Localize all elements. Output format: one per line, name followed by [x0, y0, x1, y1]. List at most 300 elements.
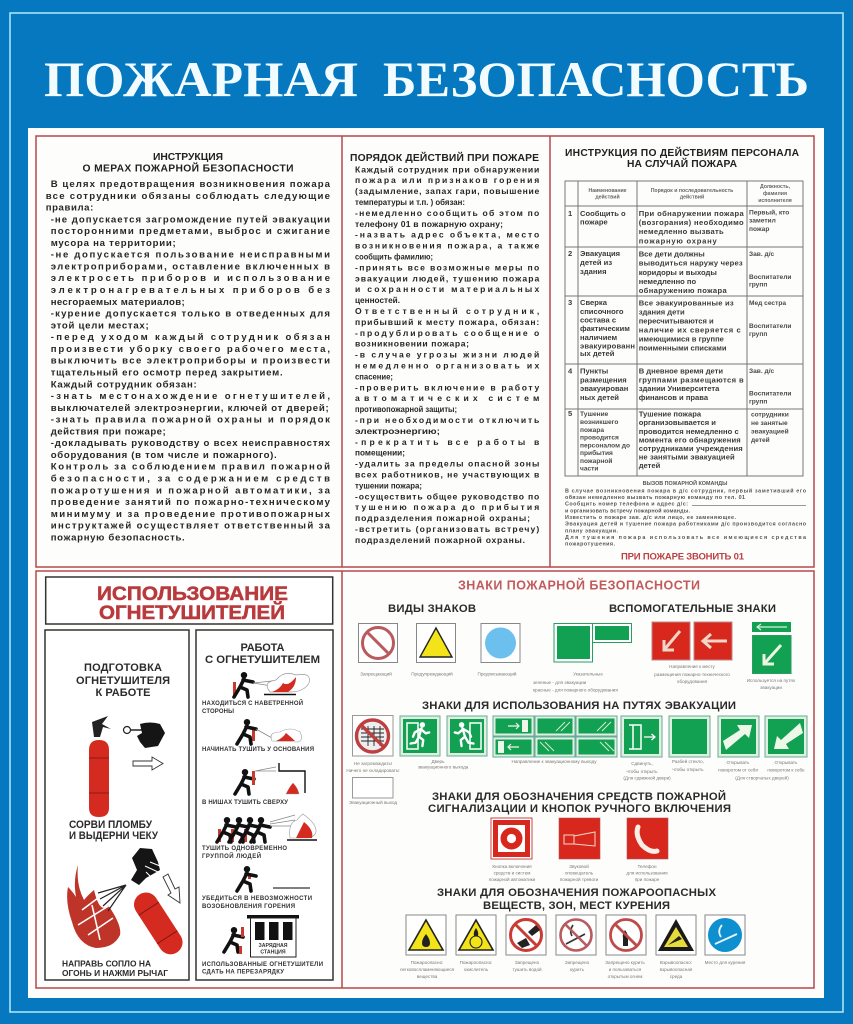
table: staff actions: (возгорания) необходимо	[639, 218, 744, 227]
text block: procedure: телефону 01 в пожарную охрану;	[355, 219, 503, 229]
text block: instruction rules: действия при пожаре;	[51, 426, 166, 437]
sign: explosive: Взрывоопасно:	[660, 960, 692, 965]
sign: red direction arrows: оборудования	[677, 679, 708, 684]
table: staff actions: Должность,	[760, 184, 791, 190]
sign: slide to open	[621, 716, 671, 780]
sign: mandatory	[478, 624, 520, 676]
table: staff actions: 3	[568, 298, 572, 307]
heading: staff instruction: ИНСТРУКЦИЯ ПО ДЕЙСТВИЯМ ПЕРСОНАЛА	[565, 146, 800, 159]
table: staff actions: здания	[580, 267, 607, 276]
text block: instruction rules: инструктажей осуществляет ответственный за	[51, 521, 331, 532]
sign: red direction arrows	[652, 622, 732, 684]
signs: direction to evacuation exit	[493, 716, 617, 764]
sign: slide to open: Сдвинуть,	[631, 761, 653, 766]
sign: no open flame: и пользоваться	[609, 967, 642, 972]
sign: indicator green	[533, 624, 632, 692]
sign: prohibiting: Запрещающий	[360, 670, 392, 676]
table: staff actions: Эвакуация	[580, 249, 620, 258]
text block: procedure: подразделения пожарной охраны;	[355, 513, 530, 523]
table: staff actions: действий	[595, 194, 620, 200]
table: staff actions: Сверка	[580, 298, 608, 307]
table: staff actions: групп	[749, 282, 767, 288]
text block: procedure: -назвать адрес объекта, место	[355, 230, 539, 240]
sign: red direction arrows: размещения пожарно-технического	[654, 672, 730, 677]
panel: extinguisher use	[45, 577, 333, 980]
title: БЕЗОПАСНОСТЬ	[383, 51, 809, 107]
text block: instruction rules: В целях предотвращения возникновения пожара	[51, 179, 331, 190]
sub-panel: preparing the extinguisher	[45, 630, 189, 980]
sub-panel: working with extinguisher	[196, 630, 333, 980]
table: staff actions: Пункты	[580, 366, 608, 376]
table: staff actions: 4	[568, 366, 573, 376]
text block: procedure: помещении;	[355, 448, 405, 458]
sign: sounder: оповещатель	[565, 870, 594, 876]
text block: procedure: -принять все возможные меры по	[355, 262, 539, 272]
sign: flammable: легковоспламеняющиеся	[400, 967, 455, 972]
sign: flammable: Пожароопасно:	[411, 960, 443, 965]
table: staff actions: групп	[749, 398, 767, 406]
arrow: pull direction	[133, 757, 163, 770]
text block: procedure: эвакуации людей, тушению пожара	[355, 273, 540, 283]
heading: use of extinguishers: ОГНЕТУШИТЕЛЕЙ	[99, 602, 285, 624]
sign: green direction arrow	[747, 622, 796, 690]
text block: procedure: электроэнергию;	[355, 426, 440, 436]
text block: procedure: -прекратить все работы в	[355, 437, 539, 447]
sign: slide to open: (Для сдвижной двери)	[623, 774, 671, 780]
text block: procedure: температуры и т.п. ) обязан:	[355, 197, 465, 207]
text block: instruction rules: электронагревательных приборов без	[51, 285, 330, 296]
heading: auxiliary signs: ВСПОМОГАТЕЛЬНЫЕ ЗНАКИ	[609, 603, 776, 615]
panel: fire safety instruction	[46, 152, 331, 543]
table: staff actions: фамилия	[763, 190, 787, 197]
heading: hazard signs: ЗНАКИ ДЛЯ ОБОЗНАЧЕНИЯ ПОЖАРООПАСНЫХ	[437, 887, 716, 899]
text block: instruction rules: правила:	[46, 203, 93, 214]
text block: instruction rules: -не допускается пользование неисправными	[51, 250, 330, 261]
heading: preparation: ОГНЕТУШИТЕЛЯ	[76, 675, 170, 687]
text block: procedure: -удалить за пределы опасной зоны	[355, 459, 539, 469]
table: staff actions: ных детей	[580, 393, 619, 402]
sign: exit door right	[400, 716, 469, 770]
heading: staff instruction: НА СЛУЧАЙ ПОЖАРА	[627, 157, 738, 170]
text block: calling the fire brigade: ВЫЗОВ ПОЖАРНОЙ КОМАНДЫ	[643, 479, 727, 487]
table: staff actions: пожаре	[580, 218, 608, 226]
table: staff actions: имеющимися в группе	[639, 334, 724, 344]
table: staff actions: наличие их сверяется с	[639, 326, 741, 334]
sign: sounder	[559, 818, 600, 882]
signs: direction to evacuation exit: Направление к эвакуационному выходу	[512, 759, 597, 764]
sign: no water: Запрещено	[515, 960, 540, 965]
step 4: group: ТУШИТЬ ОДНОВРЕМЕННО	[202, 846, 287, 852]
sign: flammable	[400, 915, 455, 979]
sign: indicator green: Указательные	[573, 672, 603, 676]
text block: instruction rules: пожарную безопасность.	[51, 532, 185, 543]
table: staff actions: Все эвакуированные из	[639, 298, 734, 308]
table: staff actions: проводится немедленно с	[639, 427, 739, 436]
table: staff actions: финансов и права	[639, 393, 709, 402]
table: staff actions: сотрудники	[751, 412, 789, 418]
text block: procedure: -продублировать сообщение о	[355, 328, 539, 338]
step 3: in niches	[202, 763, 305, 806]
text block: procedure: -немедленно сообщить об этом по	[355, 208, 539, 218]
icon: hand pulling pin	[124, 722, 165, 748]
sign: evacuation exit: Эвакуационный выход	[349, 799, 397, 805]
text block: procedure: спасение;	[355, 371, 393, 381]
heading: instruction: ИНСТРУКЦИЯ	[153, 152, 223, 163]
sign: flammable: вещества	[417, 974, 438, 979]
table: staff actions: проводится	[580, 434, 619, 442]
sign: green direction arrow: Используется на путях	[747, 678, 796, 683]
text block: procedure: подразделений пожарной охраны.	[355, 535, 525, 545]
step 1: windward: СТОРОНЫ	[202, 709, 234, 715]
callout: call 01: ПРИ ПОЖАРЕ ЗВОНИТЬ 01	[621, 552, 745, 562]
table: staff actions: исполнителя	[758, 198, 792, 204]
table: staff actions: Первый, кто	[749, 208, 789, 216]
sign: phone	[626, 818, 668, 882]
table: staff actions: размещения	[580, 376, 627, 384]
caption: tear the seal: И ВЫДЕРНИ ЧЕКУ	[69, 830, 158, 842]
table: staff actions: момента его обнаружения	[639, 436, 741, 444]
heading: staff instruction	[565, 146, 800, 170]
step 5: make sure: УБЕДИТЬСЯ В НЕВОЗМОЖНОСТИ	[202, 896, 312, 902]
text block: instruction rules: -перед уходом каждый сотрудник обязан	[51, 332, 330, 343]
sign: red direction arrows: Направление к месту	[669, 664, 716, 669]
text block: instruction rules: этой цели местах;	[51, 320, 149, 331]
table: staff actions: эвакуирован	[580, 384, 629, 393]
heading: evacuation route signs: ЗНАКИ ДЛЯ ИСПОЛЬЗОВАНИЯ НА ПУТЯХ ЭВАКУАЦИИ	[422, 700, 736, 712]
icon: spray	[98, 885, 126, 911]
sign: do not obstruct	[346, 716, 400, 773]
sign: sounder: пожарной тревоги	[560, 876, 599, 882]
step 4: group: ГРУППОЙ ЛЮДЕЙ	[202, 852, 261, 860]
sign: break glass	[669, 716, 710, 772]
text block: procedure: и сохранности материальных	[355, 284, 540, 294]
step 5: make sure: ВОЗОБНОВЛЕНИЯ ГОРЕНИЯ	[202, 904, 295, 910]
title: ПОЖАРНАЯ	[44, 51, 358, 107]
text block: instruction rules: произвести уборку своего рабочего места,	[51, 344, 330, 355]
sign: no water	[506, 915, 546, 972]
text block: procedure: (задымление, запах гари, повышение	[355, 186, 540, 196]
sign: do not obstruct: Ничего не складировать!	[346, 768, 400, 773]
text block: procedure	[355, 164, 540, 545]
sign: smoking place	[705, 915, 746, 965]
heading: hazard signs: ВЕЩЕСТВ, ЗОН, МЕСТ КУРЕНИЯ	[483, 900, 670, 912]
table: staff actions: Зав. д/с	[749, 368, 775, 375]
table: staff actions: здания дети	[639, 308, 685, 316]
text block: procedure: возникновения пожара, а также	[355, 241, 540, 251]
sign: push to open: Открывать	[727, 760, 750, 765]
text block: instruction rules	[46, 179, 331, 543]
step 1: windward: НАХОДИТЬСЯ С НАВЕТРЕННОЙ	[202, 699, 303, 707]
text block: calling the fire brigade: пожаротушения.	[565, 542, 616, 548]
text block: procedure: Каждый сотрудник при обнаружении	[355, 164, 539, 174]
sign: explosive: среда	[670, 974, 683, 979]
arrow: press lever	[163, 874, 180, 903]
heading: hazard signs	[437, 887, 716, 912]
sign: prohibiting	[358, 624, 398, 676]
heading: preparation: ПОДГОТОВКА	[84, 662, 162, 674]
sign: pull to open: Открывать	[775, 760, 798, 765]
table: staff actions: пожарной	[580, 457, 612, 465]
table: staff actions: пожара	[580, 427, 604, 434]
text block: procedure: немедленно организовать их	[355, 360, 540, 370]
sign: exit door right: Дверь	[431, 759, 445, 764]
text block: calling the fire brigade: Эвакуация детей и тушение пожара работниками д/с производится согласно	[565, 521, 807, 528]
sign: pull to open: поворотом к себе	[767, 768, 805, 772]
table: staff actions: 5	[568, 409, 573, 418]
table: staff actions: Все дети должны	[639, 250, 705, 258]
step 4: group	[202, 814, 317, 860]
table: staff actions: возникшего	[580, 419, 618, 426]
step 6: recharge station: ЗАРЯДНАЯ	[259, 943, 288, 949]
sign: break glass: Разбей стекло,	[672, 758, 704, 764]
sign: pull to open: (Для створчатых дверей)	[735, 774, 789, 780]
sign: no open flame	[605, 915, 646, 979]
heading: signs: ЗНАКИ ПОЖАРНОЙ БЕЗОПАСНОСТИ	[458, 578, 700, 592]
text block: instruction rules: выключить все электроприборы и произвести	[51, 356, 330, 367]
text block: calling the fire brigade: Сообщить номер телефона и адрес д/с:	[565, 501, 688, 508]
caption: aim nozzle: НАПРАВЬ СОПЛО НА	[62, 958, 151, 968]
table: staff actions: групп	[749, 331, 767, 338]
step 3: in niches: В НИШАХ ТУШИТЬ СВЕРХУ	[202, 800, 288, 806]
sign: oxidizer	[456, 915, 496, 972]
sign: fire button: Кнопка включения	[492, 864, 532, 869]
text block: calling the fire brigade: обязан немедленно вызвать пожарную команду по тел. 01	[565, 494, 745, 501]
table: staff actions: В дневное время дети	[639, 366, 723, 376]
table: staff actions: немедленно по	[639, 277, 697, 286]
text block: calling the fire brigade: плану эвакуации.	[565, 528, 618, 534]
table: staff actions: ых детей	[580, 349, 615, 358]
text block: instruction rules: -знать правила пожарной охраны и порядок	[51, 415, 330, 426]
sign: oxidizer: Пожароопасно:	[460, 960, 492, 965]
step 2: from base: НАЧИНАТЬ ТУШИТЬ У ОСНОВАНИЯ	[202, 747, 314, 753]
table: staff actions: 2	[568, 249, 572, 258]
text block: procedure: -осуществить общее руководство по	[355, 491, 539, 501]
step 1: windward	[202, 672, 309, 715]
text block: procedure: прибывший к месту пожара, обязан:	[355, 317, 539, 327]
text block: procedure: противопожарной защиты;	[355, 404, 457, 414]
step 2: from base	[202, 719, 314, 753]
icon: hand with extinguisher	[129, 848, 187, 959]
table: staff actions: эвакуированн	[580, 342, 635, 350]
title	[44, 51, 809, 107]
sign: sounder: Звуковой	[569, 863, 589, 869]
table: staff actions: выводиться наружу через	[639, 258, 743, 268]
sign: slide to open: чтобы открыть	[626, 769, 658, 774]
sign: fire button: пожарной автоматики	[489, 876, 536, 882]
heading: instruction	[82, 152, 294, 174]
text block: procedure: -проверить включение в работу	[355, 382, 540, 392]
table: staff actions: Мед сестра	[749, 300, 786, 307]
table: staff actions	[565, 181, 803, 476]
table: staff actions: состава с	[580, 316, 616, 324]
sign: explosive	[656, 915, 696, 979]
heading: working: С ОГНЕТУШИТЕЛЕМ	[205, 654, 320, 666]
text block: instruction rules: оборудования (в том числе и пожарного).	[51, 450, 277, 461]
sign: do not obstruct: Не загромождать!	[354, 761, 392, 766]
table: staff actions: 1	[568, 209, 573, 218]
table: staff actions: Зав. д/с	[749, 251, 775, 258]
white content panel	[28, 128, 824, 998]
table: staff actions: здании Университета	[639, 384, 720, 393]
sign: evacuation exit	[349, 778, 397, 805]
text block: procedure: всех работников, не участвующих в	[355, 470, 539, 480]
heading: use of extinguishers	[46, 577, 333, 624]
sign: push to open: поворотом от себя	[718, 768, 758, 772]
text block: instruction rules: безопасности, за содержанием средств	[51, 474, 330, 484]
table: staff actions: Воспитатели	[749, 323, 791, 330]
caption: tear the seal	[69, 819, 158, 842]
table: staff actions: фактическим	[580, 324, 630, 333]
text block: procedure: Ответственный сотрудник,	[355, 306, 539, 316]
text block: procedure: сообщить фамилию;	[355, 252, 433, 262]
sign: indicator green: зеленые - для эвакуации	[533, 680, 587, 685]
table: staff actions: эвакуацией	[751, 428, 789, 436]
text block: instruction rules: тщательный его осмотр перед закрытием.	[51, 368, 283, 378]
sign: no open flame: Запрещено курить	[605, 960, 645, 965]
text block: instruction rules: -знать местонахождение огнетушителей,	[51, 391, 330, 402]
sign: green direction arrow: эвакуации	[760, 685, 782, 690]
table: staff actions: пожар	[749, 226, 769, 233]
sign: exit door left	[447, 716, 487, 756]
sign: explosive: взрывоопасная	[660, 967, 693, 972]
sign: fire button	[489, 818, 536, 882]
heading: alarm signs: ЗНАКИ ДЛЯ ОБОЗНАЧЕНИЯ СРЕДСТВ ПОЖАРНОЙ	[432, 790, 726, 803]
table: staff actions: поименными списками	[639, 344, 727, 352]
sign: smoking place: Место для курения	[705, 960, 746, 965]
table: staff actions: списочного	[580, 307, 624, 316]
text block: instruction rules: Контроль за соблюдением правил пожарной	[51, 462, 330, 473]
table: staff actions: коридоры и выходы	[639, 268, 717, 277]
table: staff actions: Воспитатели	[749, 274, 791, 281]
sign: no smoking	[556, 915, 596, 972]
text block: instruction rules: выключателей электроэнергии, ключей от дверей;	[51, 403, 329, 414]
caption: aim nozzle: ОГОНЬ И НАЖМИ РЫЧАГ	[62, 968, 168, 978]
table: staff actions: заметил	[749, 218, 776, 224]
sign: mandatory: Предписывающий	[478, 670, 517, 676]
table: staff actions: персоналом до	[580, 442, 630, 450]
text block: calling the fire brigade	[565, 479, 807, 548]
heading: alarm signs: СИГНАЛИЗАЦИИ И КНОПОК РУЧНОГО ВКЛЮЧЕНИЯ	[428, 803, 731, 815]
table: staff actions: детей	[639, 461, 661, 470]
sign: warning: Предупреждающий	[411, 670, 453, 676]
step 6: recharge station: СДАТЬ НА ПЕРЕЗАРЯДКУ	[202, 970, 284, 976]
heading: procedure: ПОРЯДОК ДЕЙСТВИЙ ПРИ ПОЖАРЕ	[350, 151, 539, 164]
text block: procedure: возникновении пожара;	[355, 339, 469, 349]
heading: use of extinguishers: ИСПОЛЬЗОВАНИЕ	[97, 584, 288, 605]
table: staff actions: пожарную охрану	[639, 236, 717, 246]
table: staff actions: Сообщить о	[580, 209, 626, 218]
sign: warning	[411, 624, 456, 676]
table: staff actions: организовывается и	[639, 418, 716, 427]
sign: break glass: чтобы открыть	[672, 767, 704, 772]
text block: instruction rules: пожаротушения и пожарной автоматики, за	[51, 485, 331, 496]
table: staff actions: не занятые	[751, 420, 788, 427]
sign: phone: при пожаре	[635, 877, 660, 882]
sign: fire button: средств и систем	[494, 870, 530, 876]
text block: procedure: тушении пожара;	[355, 480, 422, 490]
table: staff actions: Тушение	[580, 411, 609, 418]
table: staff actions: При обнаружении пожара	[639, 209, 744, 218]
text block: instruction rules: минимуму и за проведение противопожарных	[51, 509, 331, 520]
table: staff actions: Воспитатели	[749, 390, 791, 398]
text block: instruction rules: Каждый сотрудник обязан:	[51, 379, 197, 390]
text block: procedure: пожара или признаков горения	[355, 175, 539, 185]
text block: instruction rules: электроприборами, оставление включенных в	[51, 262, 330, 272]
text block: instruction rules: электросеть приборов и использование	[51, 273, 330, 284]
sign: oxidizer: окислитель	[464, 967, 489, 972]
text block: procedure: -при необходимости отключить	[355, 415, 539, 425]
step 6: recharge station: ИСПОЛЬЗОВАННЫЕ ОГНЕТУШИТЕЛИ	[202, 962, 323, 968]
step 5: make sure	[202, 866, 312, 910]
text block: instruction rules: несгораемых материалов;	[51, 297, 185, 308]
table: staff actions: действий	[680, 194, 704, 200]
heading: alarm signs	[428, 790, 731, 815]
heading: preparation	[76, 662, 170, 699]
text block: instruction rules: -курение допускается только в отведенных для	[51, 309, 330, 320]
sign: exit door right: эвакуационного выхода	[418, 764, 469, 770]
sign: no smoking: Запрещено	[565, 960, 590, 965]
table: staff actions: части	[580, 466, 598, 472]
text block: calling the fire brigade: Известить о пожаре зав. д/с или лицо, ее заменяющее.	[565, 515, 736, 521]
text block: instruction rules: -не допускается загромождение путей эвакуации	[51, 214, 330, 225]
table: staff actions: сотрудниками учреждения	[639, 444, 743, 453]
sign: no smoking: курить	[570, 967, 585, 972]
heading: sign kinds: ВИДЫ ЗНАКОВ	[388, 603, 476, 615]
sign: no water: тушить водой	[512, 966, 542, 972]
table: staff actions: не занятыми эвакуацией	[639, 452, 735, 462]
text block: instruction rules: все сотрудники обязаны соблюдать следующие	[46, 191, 330, 202]
table: staff actions: детей из	[580, 258, 612, 267]
step 6: recharge station: СТАНЦИЯ	[260, 950, 286, 956]
text block: instruction rules: -докладывать руководству о всех неисправностях	[51, 438, 331, 449]
table: staff actions: детей	[751, 436, 770, 444]
table: staff actions: группами размещаются в	[639, 376, 744, 384]
table: staff actions: обнаружению пожара	[639, 286, 727, 295]
sign: pull to open	[735, 716, 807, 780]
text block: instruction rules: посторонними предметами, выброс и сжигание	[51, 226, 330, 237]
sign: phone: Телефон	[637, 864, 657, 869]
text block: procedure: -встретить (организовать встречу)	[355, 524, 539, 534]
table: staff actions: Порядок и последовательность	[651, 188, 733, 194]
heading: working	[205, 642, 320, 666]
text block: procedure: -в случае угрозы жизни людей	[355, 350, 539, 360]
icon: upright extinguisher	[89, 716, 111, 817]
sign: no open flame: открытым огнем	[608, 974, 642, 979]
sign: push to open	[718, 716, 759, 772]
icon: flame	[67, 865, 120, 948]
red frames	[36, 136, 814, 988]
table: staff actions: немедленно вызвать	[639, 227, 724, 236]
text block: procedure: ценностей.	[355, 295, 400, 305]
panel: staff instruction	[565, 146, 807, 562]
text block: procedure: автоматических систем	[355, 393, 539, 403]
text block: calling the fire brigade: Для тушения пожара использовать все имеющиеся средства	[565, 535, 807, 541]
sign: phone: для использования	[626, 870, 668, 876]
sign: indicator green: красные - для пожарного оборудования	[533, 688, 618, 692]
text block: calling the fire brigade: и организовать встречу пожарной команды.	[565, 507, 690, 514]
table: staff actions: пересчитываются и	[639, 316, 714, 326]
table: staff actions: Тушение пожара	[639, 410, 702, 418]
heading: instruction: О МЕРАХ ПОЖАРНОЙ БЕЗОПАСНОСТИ	[82, 162, 294, 174]
panel: procedure during fire	[350, 151, 540, 545]
text block: calling the fire brigade: В случае возникновения пожара в д/с сотрудник, первый заметивший его	[565, 488, 807, 495]
panel: fire safety signs	[346, 578, 807, 979]
caption: aim nozzle	[62, 958, 168, 978]
text block: instruction rules: проведение занятий по пожарно-техническому	[51, 497, 331, 508]
table: staff actions: наличием	[580, 333, 618, 342]
step 6: recharge station	[202, 915, 323, 976]
heading: working: РАБОТА	[240, 642, 285, 654]
